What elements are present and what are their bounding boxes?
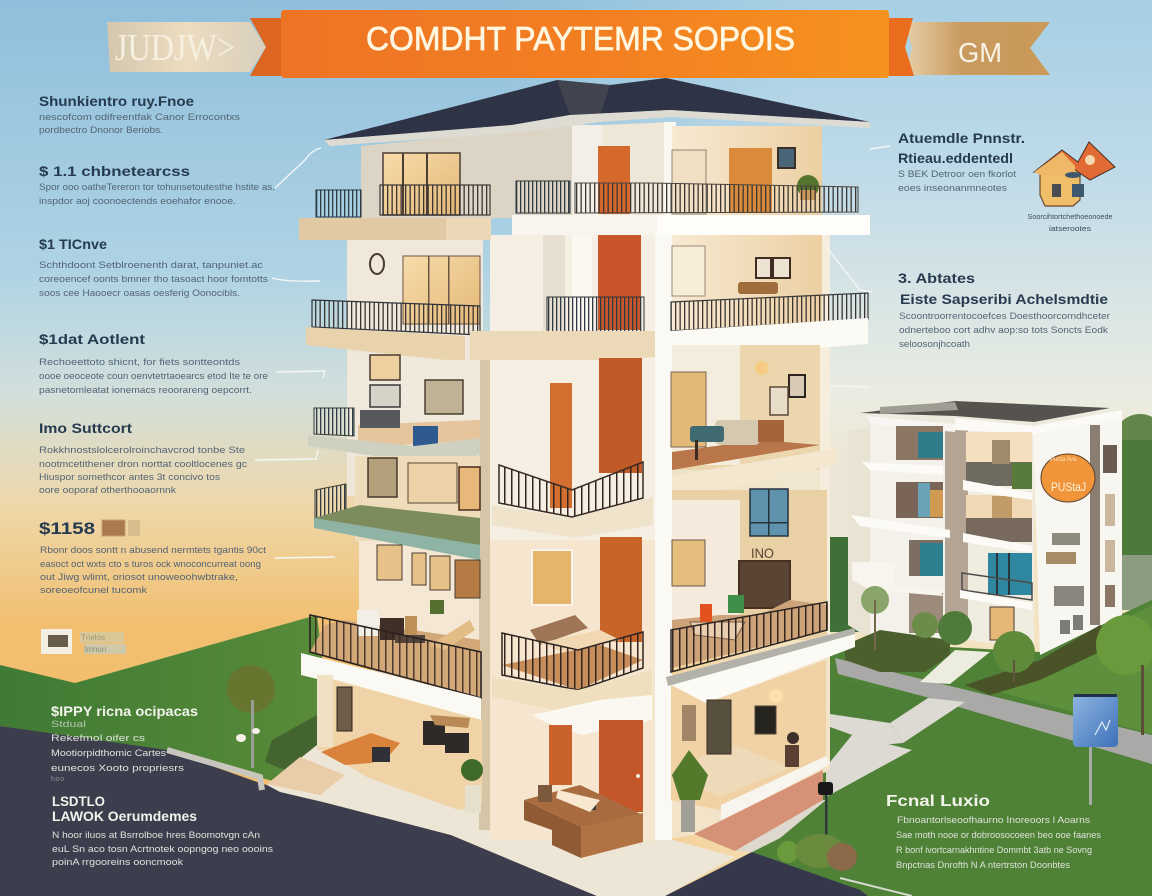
base and pavement — [267, 745, 735, 896]
text block: right item 1: eoes inseonanmneotes — [898, 183, 1007, 194]
mailbox — [818, 782, 833, 840]
fourth floor windows — [368, 458, 397, 497]
centre balcony railing — [502, 632, 643, 690]
right ribbon: GM — [958, 37, 1002, 68]
main condo building — [267, 78, 870, 896]
roof — [324, 78, 870, 146]
centre door and window — [600, 537, 642, 642]
secondary building centre column rooms — [966, 432, 1032, 480]
front steps — [267, 757, 345, 795]
concrete paths — [826, 698, 965, 797]
second floor door — [598, 235, 641, 330]
icon caption — [1028, 212, 1112, 233]
left balcony railing — [310, 615, 481, 698]
right balcony railing — [671, 602, 827, 672]
blue info sign — [1073, 694, 1118, 805]
text block: lawn right item: Fbnoantorlseoofhaurno Inoreoors l Aoarns — [897, 815, 1090, 826]
top floor plant — [797, 175, 819, 200]
text block: right item 2: Scoontroorrentocoefces Doesthoorcorndhceter — [899, 311, 1110, 322]
secondary building orange sign — [1041, 454, 1095, 502]
fourth floor — [314, 456, 827, 642]
text block: lawn item 7: hoo — [51, 776, 64, 783]
third floor balcony slab — [492, 497, 653, 538]
text block: left item 5: oore ooporaf otherthooaornnk — [39, 485, 176, 496]
text block: left item 3: Schthdoont Setblroenenth darat, tanpuniet.ac — [39, 260, 263, 271]
third floor slab — [308, 435, 480, 468]
text block: lawn right item: R bonf ivortcarnakhntine Dommbt 3atb ne Sovng — [896, 845, 1092, 856]
fifth floor balconies — [301, 595, 855, 735]
orange doors — [549, 725, 572, 785]
third floor left windows and pictures — [370, 355, 400, 380]
wall mirror — [370, 254, 384, 274]
right balcony furniture — [672, 595, 828, 668]
left balcony floor — [310, 620, 480, 698]
text block: left item 1: nescofcom odifreentfak Canor Errocontxs — [39, 112, 240, 123]
text block: right item 1: Atuemdle Pnnstr. — [898, 130, 1025, 146]
left ribbon — [107, 18, 281, 76]
text block: left item 5: Hiuspor somethcor antes 3t concivo tos — [39, 472, 220, 483]
icon: small appliance with label: Imnon — [84, 645, 106, 654]
potted plant — [672, 750, 708, 832]
fourth floor railing — [315, 484, 346, 520]
text block: left item 6 with icon: out Jiwg wlimt, oriosot unoweoohwbtrake, — [40, 572, 238, 583]
left balcony slab — [301, 653, 481, 720]
text block: road item 8: N hoor iluos at Bsrrolboe hres Boomotvgn cAn — [52, 830, 260, 841]
white plinth — [721, 756, 830, 822]
TV — [755, 706, 776, 734]
second floor slabs — [306, 327, 465, 362]
text block: left item 1 — [39, 93, 240, 136]
secondary building side windows — [1052, 533, 1080, 545]
text block: right item 1: Rtieau.eddentedl — [898, 150, 1013, 166]
text block: lawn item 7 — [51, 703, 198, 783]
third floor railing — [314, 408, 354, 436]
left tree and lights — [227, 665, 317, 770]
left pillar — [317, 675, 333, 747]
secondary building balcony slabs — [862, 462, 943, 475]
third floor room floor and furniture — [672, 440, 820, 470]
icon: small appliance with label — [41, 629, 126, 654]
text block: lawn item 7: Rekefmol oifer cs — [51, 733, 145, 744]
second floor railings — [312, 293, 868, 335]
third floor balcony railing — [499, 462, 643, 517]
text block: left item 5 — [39, 420, 247, 496]
text block: left item 2 — [39, 163, 275, 207]
callout arrows — [255, 146, 890, 558]
text block: left item 3: $1 TICnve — [39, 236, 107, 252]
text block: lawn right item: Sae moth nooe or dobroosocoeen beo ooe faanes — [896, 830, 1101, 841]
text block: road item 8: poinA rrgooreins ooncmook — [52, 857, 183, 868]
doorway — [337, 687, 352, 731]
dining chairs — [423, 715, 470, 753]
grey side road — [835, 658, 1152, 764]
top floor — [299, 122, 870, 240]
text block: right item 2: seloosonjhcoath — [899, 339, 970, 350]
orange rug — [321, 733, 400, 765]
text block: left item 3: soos cee Haooecr oasas oesferig Oonocibls. — [39, 288, 240, 299]
right background trees — [830, 414, 1152, 632]
left pillar and centre tower — [317, 670, 482, 750]
title banner — [107, 10, 1050, 78]
left green lawn — [0, 615, 340, 800]
fifth storey windows — [377, 545, 480, 598]
text block: road item 8: LAWOK Oerumdemes — [52, 808, 197, 824]
shrubs around secondary building — [845, 586, 1152, 735]
text block: left item 4: pasnetomleatat ionemacs reoorareng oepcorrt. — [39, 385, 252, 396]
secondary building orange sign: PUStaJ — [1051, 480, 1086, 494]
secondary apartment building — [848, 401, 1122, 655]
centre balcony slab — [492, 670, 652, 715]
text block: left item 5: nootmcetithener dron norttat cooltlocenes gc — [39, 459, 247, 470]
text block: left item 1: pordbectro Dnonor Beriobs. — [39, 125, 163, 136]
ground floor left room — [317, 675, 483, 813]
secondary building orange sign: Pusta fiva — [1050, 457, 1077, 463]
third floor sofa — [358, 410, 480, 446]
wall art — [682, 705, 696, 741]
secondary building roof — [860, 401, 1110, 422]
text block: road item 8: LSDTLO — [52, 793, 105, 809]
icon: house illustration — [1034, 142, 1115, 206]
third floor room art — [671, 372, 706, 447]
top floor slabs — [299, 218, 491, 240]
text block: left item 3 — [39, 236, 268, 299]
icon: cash note — [102, 520, 140, 536]
dark road — [0, 726, 912, 896]
centre balcony furniture — [530, 615, 620, 655]
text block: left item 6 with icon: $1158 — [39, 519, 95, 538]
text block: left item 4: $1dat Aotlent — [39, 331, 145, 347]
text block: left item 6 with icon: Rbonr doos sontt n abusend nermtets tgantis 90ct — [40, 545, 266, 556]
text block: lawn right item — [886, 793, 1101, 871]
text block: lawn item 7: Stdual — [51, 719, 86, 730]
brick ramp — [694, 770, 823, 851]
text block: lawn item 7: $IPPY ricna ocipacas — [51, 703, 198, 719]
potted plant — [461, 759, 483, 813]
second floor pictures and window — [672, 246, 705, 296]
second floor window — [403, 256, 480, 324]
ground floor right room — [671, 660, 830, 851]
sliding door — [707, 700, 731, 754]
landscaped bush — [777, 834, 857, 871]
secondary building left column windows — [896, 426, 943, 460]
text block: right item 1 — [898, 130, 1025, 194]
text block: right item 2: Eiste Sapseribi Achelsmdtie — [900, 291, 1108, 307]
tall doors — [550, 383, 572, 508]
text block: left item 2: $ 1.1 chbnetearcss — [39, 163, 190, 179]
second floor — [306, 235, 868, 362]
top floor window — [383, 153, 460, 215]
icon caption: iatserootes — [1049, 224, 1091, 233]
text block: lawn item 7: eunecos Xooto propriesrs — [51, 763, 184, 774]
text block: road item 8 — [52, 793, 273, 868]
upper right lawn — [1000, 605, 1152, 734]
text block: left item 2: inspdor aoj coonoectends eoehafor enooe. — [39, 196, 236, 207]
text block: right item 2: 3. Abtates — [898, 270, 975, 286]
third floor — [308, 345, 838, 538]
room doorway — [739, 561, 790, 608]
bag — [372, 747, 390, 762]
text block: left item 4: oooe oeoceote coun oenvtetrtaoearcs etod Ite te ore — [39, 371, 268, 382]
text block: left item 6 with icon: soreoeofcunel tucomk — [40, 585, 147, 596]
icon caption: Soorcihtortchethoeonoede — [1028, 212, 1112, 221]
wall lamp — [769, 689, 783, 703]
right floor slab — [672, 448, 838, 502]
text block: left item 6 with icon: easoct oct wxts cto s turos ock wnoconcurreat oong — [40, 559, 261, 570]
icon: small appliance with label: Tnelos — [81, 633, 105, 642]
right balcony slab — [666, 628, 855, 703]
text block: lawn right item: Bnpctnas Dnrofth N A ntertrston Doonbtes — [896, 860, 1070, 871]
wall lettering: INO — [751, 545, 774, 561]
fourth floor green terrace — [314, 505, 480, 545]
right ground base lawn — [752, 600, 1152, 896]
text block: left item 2: Spor ooo oatheTereron tor tohunsetoutesthe hstite as. — [39, 182, 275, 193]
text block: lawn right item: Fcnal Luxio — [886, 793, 990, 810]
blue window — [750, 489, 788, 536]
right ribbon — [889, 18, 1050, 76]
patch of lawn near path — [830, 680, 928, 724]
statue — [785, 732, 799, 767]
main title: COMDHT PAYTEMR SOPOIS — [366, 20, 795, 57]
top floor railings — [316, 181, 858, 217]
text block: lawn item 7: Mootiorpidthomic Cartes — [51, 748, 166, 759]
text block: left item 5: Imo Suttcort — [39, 420, 132, 436]
top floor doors — [598, 146, 630, 214]
text block: right item 1: S BEK Detroor oen fkorlot — [898, 169, 1016, 180]
text block: right item 2 — [898, 270, 1110, 350]
ground floor centre — [524, 720, 643, 858]
text block: left item 4: Rechoeettoto shicnt, for fiets sontteontds — [39, 357, 240, 368]
text block: road item 8: euL Sn aco tosn Acrtnotek oopngog neo oooins — [52, 844, 273, 855]
text block: left item 5: Rokkhnostslolcerolroinchavcrod tonbe Ste — [39, 445, 245, 456]
room window — [672, 540, 705, 586]
text block: left item 6 with icon — [39, 519, 266, 596]
central orange banner — [281, 10, 889, 78]
text block: right item 2: odnerteboo cort adhv aop:so tots Soncts Eodk — [899, 325, 1108, 336]
text block: left item 1: Shunkientro ruy.Fnoe — [39, 93, 194, 109]
text block: left item 4 — [39, 331, 268, 396]
left ribbon: JUDJW> — [115, 27, 235, 69]
top floor picture — [778, 148, 795, 168]
wooden desk — [524, 785, 643, 858]
text block: left item 3: coreoencef oonts bmner tho tasoact hoor fomtotts — [39, 274, 268, 285]
